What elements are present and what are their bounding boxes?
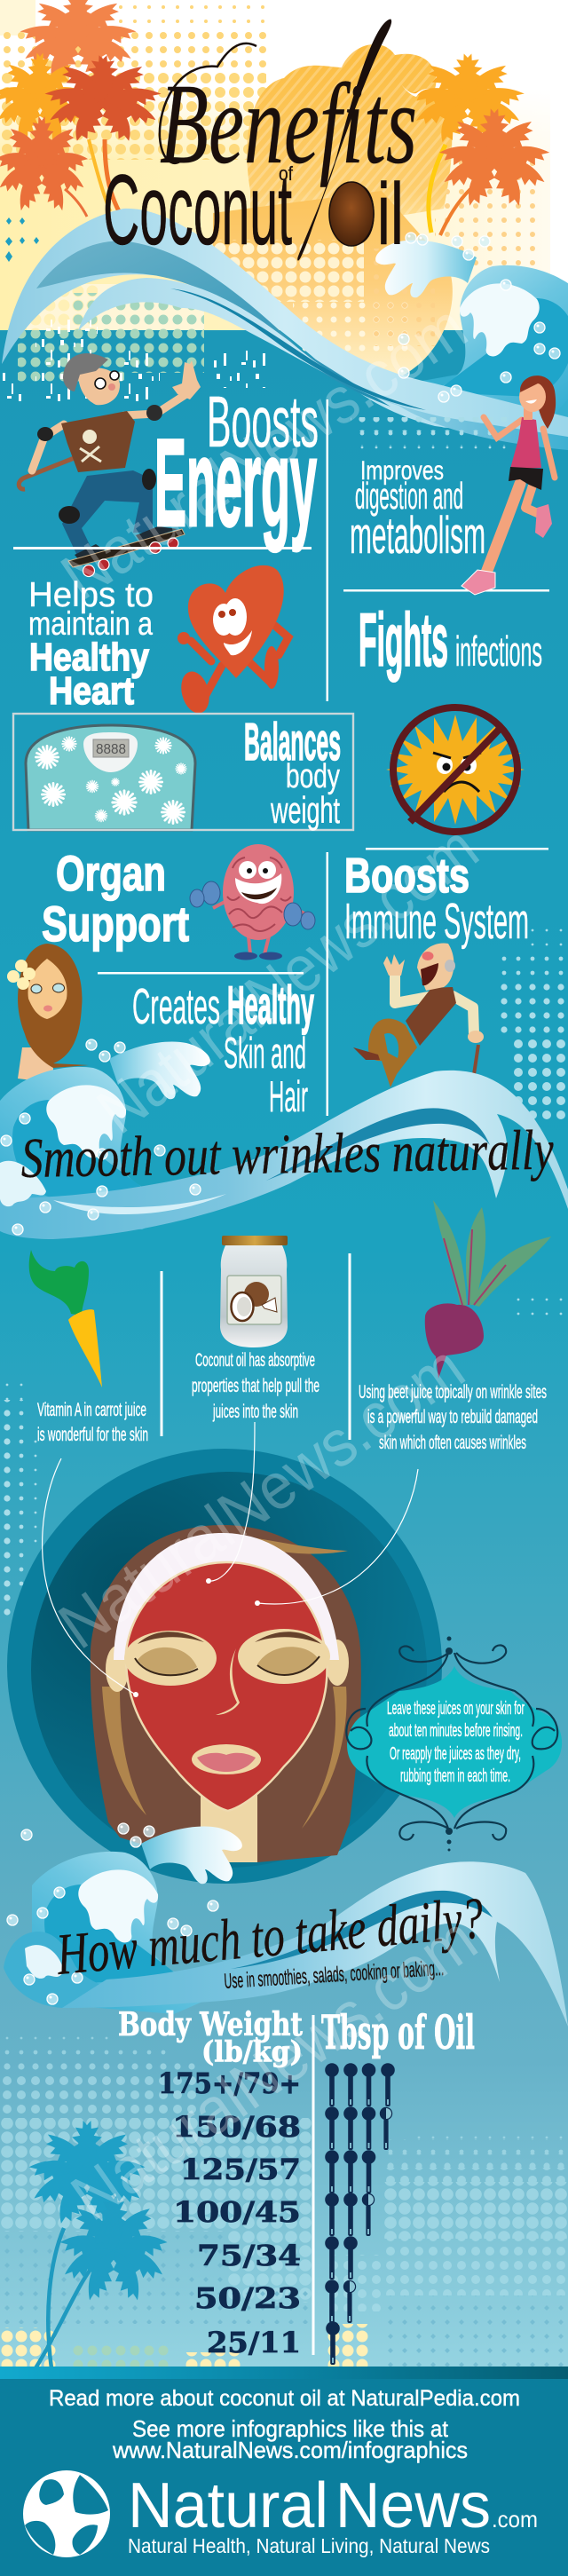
table header: [118, 2006, 475, 2068]
headband: [114, 1533, 339, 1660]
smile: [224, 630, 252, 655]
halftone: upper left dots: [0, 0, 541, 266]
spoons row 50: [325, 2280, 356, 2323]
second wave: [0, 1039, 568, 1239]
spoons row 150: [325, 2106, 392, 2150]
spoons row 75: [325, 2236, 358, 2280]
infographic canvas: Balances: [244, 713, 341, 771]
panel: balances body weight: [13, 713, 353, 831]
text: coconut oil absorptive: [192, 1350, 320, 1422]
footer line 2: See more infographics like this at: [132, 2415, 449, 2442]
text: beet juice: [359, 1382, 547, 1453]
brows: [138, 1632, 321, 1644]
watermarks: NaturalNews.com: [83, 810, 491, 1148]
knee pads: [59, 469, 156, 524]
hair highlights: [102, 1533, 348, 1829]
waving hand: [383, 954, 405, 976]
lips: [197, 1753, 256, 1772]
cloud stripes: [247, 44, 452, 240]
callout badge: [346, 1637, 562, 1852]
trunks: [36, 2228, 99, 2368]
nose: [216, 1648, 240, 1715]
mouth inner: [241, 888, 277, 899]
infographic canvas: Energy: [154, 413, 317, 552]
front shoe: [462, 570, 495, 595]
back shoe: [535, 504, 552, 538]
foam left: [25, 1945, 64, 1979]
open mouth: [421, 963, 438, 985]
footer band: [0, 2367, 568, 2379]
lower halftone: [0, 2033, 568, 2367]
lips: [43, 1005, 52, 1012]
wave crest: [2, 209, 568, 444]
logo tagline: Natural Health, Natural Living, Natural News: [128, 2534, 490, 2557]
table weights: [158, 2066, 301, 2359]
text Boosts: Boosts: [207, 382, 319, 462]
mask: [126, 1562, 327, 1811]
icon: globe logo: [23, 2470, 110, 2557]
head: [417, 943, 454, 991]
trousers: [368, 1018, 417, 1087]
old man with cane: [353, 943, 484, 1104]
halftone left of face: [0, 1287, 568, 1622]
gripping hand: [468, 1031, 484, 1043]
third wave: [4, 1823, 568, 2027]
word Boosts: Boosts: [344, 848, 469, 903]
icon: beet: [425, 1200, 551, 1379]
line 1: Improves: [360, 456, 444, 486]
palm trees left: [0, 0, 162, 217]
row 125: 125/57: [180, 2153, 301, 2186]
table spoons: [325, 2063, 395, 2365]
crest: [0, 1071, 568, 1239]
shoulder: [18, 1047, 53, 1083]
callout dots: [133, 1578, 260, 1697]
spoons row 125: [325, 2150, 375, 2193]
trouser gap: [384, 1033, 398, 1058]
panel text: healthy skin and hair: Creates: [132, 978, 220, 1035]
badge scrolls: [346, 1645, 557, 1840]
legs and arms: [191, 626, 288, 701]
germ face: [433, 753, 481, 792]
icon: brain with dumbbells: [190, 844, 315, 960]
eyes: [239, 861, 276, 879]
scale display housing: [83, 732, 138, 772]
infographic canvas: Healthy: [227, 976, 314, 1035]
line 2: is wonderful for the skin: [37, 1425, 148, 1445]
heading: boosts energy: [154, 382, 319, 552]
body weight header: Body Weight: [118, 2006, 303, 2043]
dark stripe: [266, 1108, 490, 1181]
divider lines: [13, 399, 549, 1116]
beet leaves: [433, 1200, 551, 1307]
carrot leaves: [29, 1250, 89, 1316]
lashes: [135, 1656, 320, 1675]
word weight: weight: [270, 789, 340, 831]
line 3: juices into the skin: [212, 1402, 298, 1422]
icon: coconut O: [329, 182, 374, 246]
front leg: [486, 484, 520, 573]
brain legs: [213, 901, 306, 954]
footer panel: [0, 2379, 568, 2576]
panel border: [13, 714, 353, 830]
beet stems: [444, 1229, 506, 1305]
logo wordmark: Natural News: [128, 2470, 491, 2541]
watermarks: NaturalNews.com: [59, 1901, 489, 2234]
skull emblem: [80, 430, 101, 462]
coconut half: [231, 1292, 254, 1321]
line 1: Organ: [56, 845, 166, 901]
face: [28, 959, 67, 1019]
panel text: boosts immune system: [344, 848, 529, 950]
title word Benefits: Benefits: [160, 60, 417, 188]
face mask portrait: [7, 1422, 442, 1884]
row 75: 75/34: [197, 2239, 301, 2272]
wave ribbon: [78, 278, 568, 450]
jeans: [62, 470, 153, 557]
jar lid: [222, 1236, 288, 1245]
wave dark band: [36, 241, 390, 407]
badge body: [347, 1666, 562, 1818]
elbow pad: [37, 427, 53, 441]
teal edge halftone and distress: [0, 284, 266, 404]
ribbon: [62, 1861, 568, 2027]
skater old man: [19, 353, 201, 577]
hair: [520, 375, 556, 429]
vest: [406, 987, 456, 1046]
germ body: [386, 715, 525, 825]
nose: [108, 383, 115, 391]
line 1: Helps to: [28, 576, 154, 614]
eyelids: [138, 1647, 318, 1675]
line 2: Support: [42, 896, 189, 952]
brain body: [223, 844, 294, 940]
dark stripe: [231, 1891, 493, 1969]
cane: [469, 1045, 478, 1104]
dosage table divider: [312, 2015, 314, 2355]
back leg: [525, 486, 541, 515]
bubbles: [7, 1823, 218, 2004]
left arm: [32, 424, 64, 470]
lower curl: [4, 1932, 151, 2008]
pupils: [218, 609, 236, 618]
neck: [201, 1784, 257, 1862]
row 150: 150/68: [172, 2110, 301, 2144]
panel text: healthy skin and hair: Skin and: [224, 1030, 306, 1078]
icon: bathroom scale: [26, 725, 195, 830]
line 2: properties that help pull the: [192, 1376, 320, 1396]
head: [78, 368, 120, 405]
icon: carrot: [29, 1250, 102, 1387]
units header: (lb/kg): [201, 2035, 303, 2068]
helmet: [63, 353, 108, 391]
spoons row 175: [325, 2063, 395, 2106]
title swash of f: [298, 20, 391, 260]
neck: [524, 404, 532, 420]
halftone behind runner: [351, 417, 507, 460]
shirt: [61, 411, 135, 472]
nose: [422, 952, 433, 960]
jar glass: [220, 1245, 288, 1347]
line 2: maintain a: [28, 605, 153, 642]
line 1: Vitamin A in carrot juice: [37, 1400, 146, 1420]
crowns: [28, 2119, 146, 2228]
halftone right of old man: [497, 923, 568, 1122]
line 1: Coconut oil has absorptive: [195, 1350, 315, 1371]
scale reading: 8888: [96, 742, 126, 757]
prohibition ring: [393, 707, 517, 832]
hair: [91, 1525, 361, 1862]
callout lines: [43, 1422, 418, 1695]
cream dots at bottom of table: [0, 2324, 369, 2367]
small diamonds at left edge: [5, 217, 39, 262]
hair: [445, 960, 455, 972]
wave curl, mirrored: [373, 241, 568, 428]
footer: [0, 2367, 568, 2576]
row 100: 100/45: [173, 2195, 301, 2229]
right arm: [124, 391, 192, 415]
sneakers: [234, 952, 282, 960]
arms: [484, 417, 555, 478]
eyes: [213, 598, 247, 636]
left dumbbell: [190, 881, 220, 907]
inner circle: [31, 1472, 427, 1868]
panel text: digestion: [350, 456, 485, 565]
panel text: healthy skin and hair: [132, 976, 314, 1121]
orange halftone under title: [213, 191, 453, 377]
ears: [106, 1640, 349, 1692]
wave base right: [417, 355, 568, 444]
row 25: 25/11: [207, 2326, 301, 2359]
bubbles: [1, 1039, 201, 1235]
smile: [525, 399, 537, 404]
mouth: [235, 873, 281, 904]
heart body: [188, 565, 284, 678]
watermarks: NaturalNews.com: [46, 1330, 477, 1663]
line 3: Healthy: [29, 636, 149, 679]
skateboard: [68, 529, 185, 567]
panel text: healthy skin and hair: Hair: [269, 1073, 308, 1121]
tank top: [510, 417, 541, 469]
elbow pad right: [146, 405, 162, 421]
top wave: [2, 209, 568, 450]
coconut chunk: [262, 1298, 277, 1312]
coconut whole: [244, 1282, 269, 1307]
spoons row 25: [326, 2321, 340, 2365]
right dumbbell: [284, 903, 315, 929]
runner woman: [462, 375, 556, 595]
wave stripe: [170, 288, 426, 410]
icon: no germs sign: [386, 707, 525, 832]
curl: [0, 1042, 213, 1229]
fringe: [520, 377, 550, 392]
lips patch: [192, 1744, 261, 1774]
title word Coconut: Coconut: [103, 154, 292, 265]
title B flourish: [160, 43, 256, 163]
jar label: [227, 1276, 281, 1324]
icon: running heart: [177, 565, 288, 716]
text: vitamin A: [37, 1400, 148, 1445]
shoes: [75, 526, 178, 561]
face: [519, 382, 546, 412]
word body: body: [286, 758, 340, 795]
curl: [32, 1827, 245, 2014]
arms: [395, 972, 474, 1034]
line 4: Heart: [49, 669, 134, 713]
shoe: [353, 1047, 380, 1060]
spoons row 100: [325, 2193, 375, 2236]
title word Oil: Oil: [330, 165, 404, 263]
column dividers: [160, 1253, 351, 1440]
watermarks: [46, 289, 491, 2234]
sun cloud: [247, 44, 452, 240]
blue palm trees: [28, 2119, 167, 2368]
flower: [7, 960, 36, 990]
glasses: [95, 371, 119, 389]
scale flowers: [36, 737, 186, 824]
scale screen: [93, 739, 129, 757]
shorts: [509, 467, 543, 490]
low foam: [0, 1161, 46, 1206]
raised hand: [172, 360, 201, 399]
logo domain: .com: [492, 2506, 538, 2533]
ribbon light stripe: [53, 1194, 226, 1214]
carrot root: [68, 1309, 102, 1387]
title: [103, 20, 417, 265]
panel text: organ support: [42, 845, 189, 952]
prohibition slash: [410, 728, 501, 822]
hair: [18, 944, 89, 1068]
coconut flesh: [237, 1297, 251, 1316]
outer circle: [7, 1449, 442, 1884]
cane: [19, 457, 76, 489]
row 175: 175+/79+: [158, 2066, 301, 2100]
eye patches: [124, 1629, 330, 1686]
foot and hand: [177, 632, 279, 716]
wave bubbles: [398, 233, 560, 402]
eyes: [31, 984, 64, 993]
panel text: healthy heart: [28, 576, 154, 713]
badge dots: [446, 1637, 453, 1852]
footer line 3: www.NaturalNews.com/infographics: [112, 2437, 468, 2463]
beet body: [425, 1303, 484, 1379]
row 50: 50/23: [194, 2281, 301, 2315]
footer line 1: Read more about coconut oil at NaturalPedia.com: [49, 2386, 520, 2411]
wheels: [83, 538, 178, 577]
palm trees right: [401, 52, 549, 235]
title word of: of: [279, 162, 294, 185]
brain folds: [227, 857, 291, 931]
icon: coconut oil jar: [220, 1236, 288, 1347]
watermarks: NaturalNews.com: [49, 289, 479, 613]
long haired woman: [7, 944, 89, 1083]
